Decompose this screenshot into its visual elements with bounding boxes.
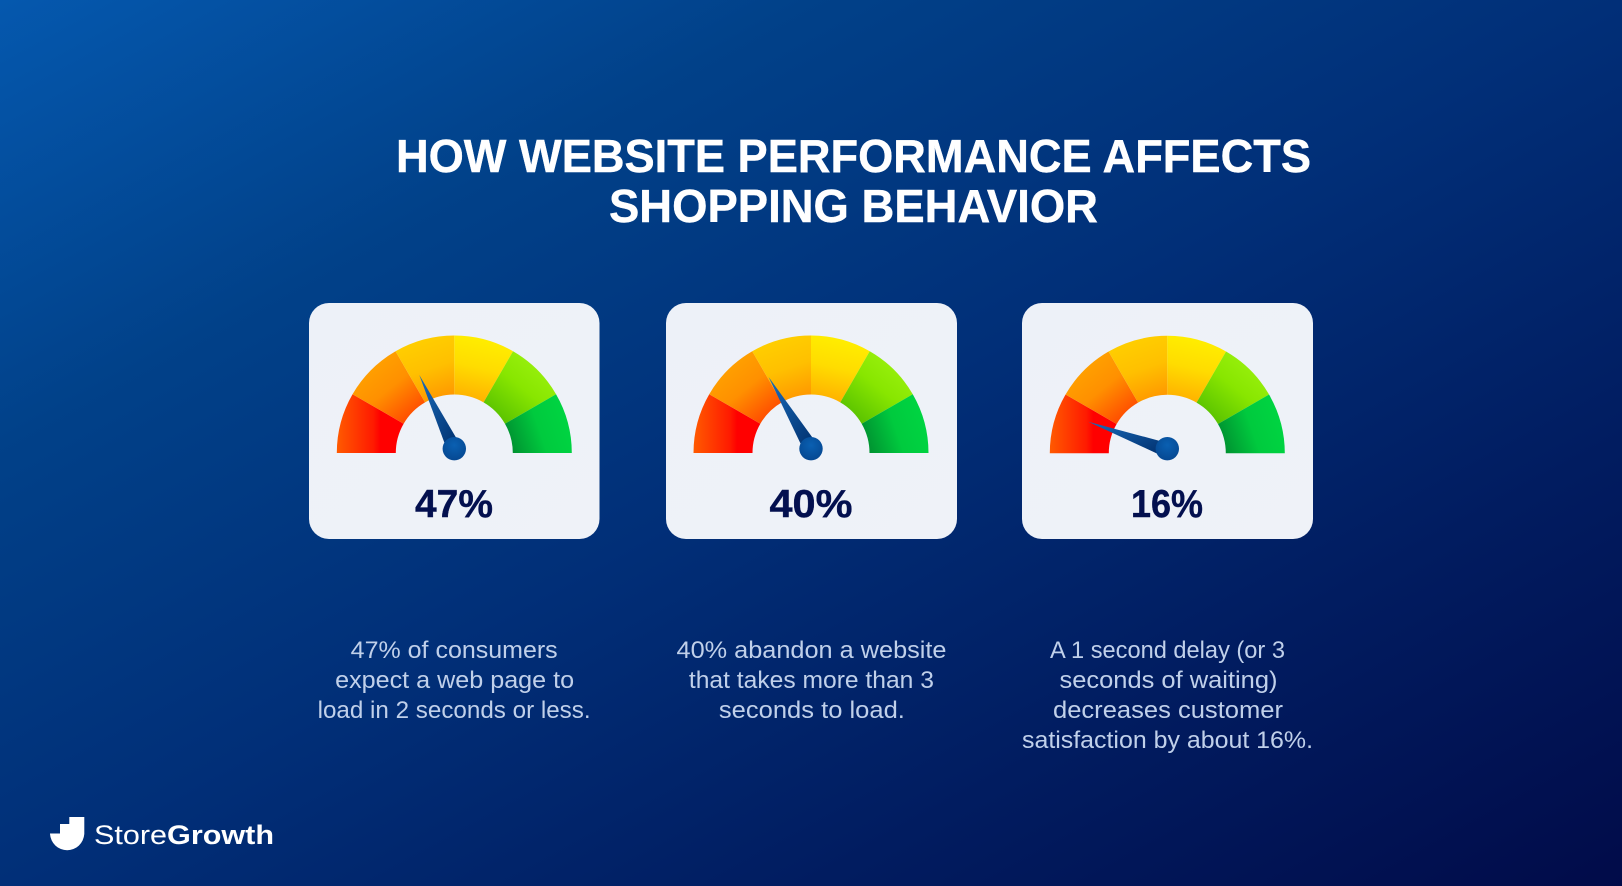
value: 40% <box>770 483 852 526</box>
panel: 47% gauge card <box>309 303 600 539</box>
gauge arc <box>694 336 928 453</box>
gauge needle <box>419 375 457 444</box>
title: SHOPPING BEHAVIOR <box>609 180 1098 232</box>
text block: 40% description: 40% abandon a website <box>676 637 946 664</box>
title <box>396 130 1311 232</box>
gauge needle <box>769 377 814 444</box>
text block: 16% description: A 1 second delay (or 3 <box>1050 637 1285 664</box>
gauge arc <box>337 336 572 453</box>
text block: 40% description <box>676 637 946 724</box>
panel: 40% gauge card <box>666 303 957 539</box>
text block: 16% description: satisfaction by about 16%. <box>1022 727 1313 754</box>
text block: 40% description: seconds to load. <box>719 697 905 724</box>
text block: 16% description <box>1022 637 1313 754</box>
gauge hub <box>799 437 823 460</box>
gauge hub <box>1156 437 1179 460</box>
logo: StoreGrowth <box>50 817 274 850</box>
value: 16% <box>1131 483 1203 526</box>
value: 47% <box>415 483 493 526</box>
gauge hub <box>443 437 466 460</box>
text block: 16% description: decreases customer <box>1053 697 1283 724</box>
text block: 47% description: expect a web page to <box>335 667 574 694</box>
logo wordmark: Store Growth <box>94 820 274 850</box>
text block: 40% description: that takes more than 3 <box>689 667 934 694</box>
gauge needle <box>1088 422 1160 454</box>
icon: stair logo mark <box>50 817 84 850</box>
gauge arc <box>1050 336 1285 453</box>
text block: 47% description <box>318 637 591 724</box>
text block: 47% description: load in 2 seconds or less. <box>318 697 591 724</box>
title: HOW WEBSITE PERFORMANCE AFFECTS <box>396 130 1311 182</box>
text block: 47% description: 47% of consumers <box>351 637 558 664</box>
text block: 16% description: seconds of waiting) <box>1060 667 1278 694</box>
panel: 16% gauge card <box>1022 303 1313 539</box>
